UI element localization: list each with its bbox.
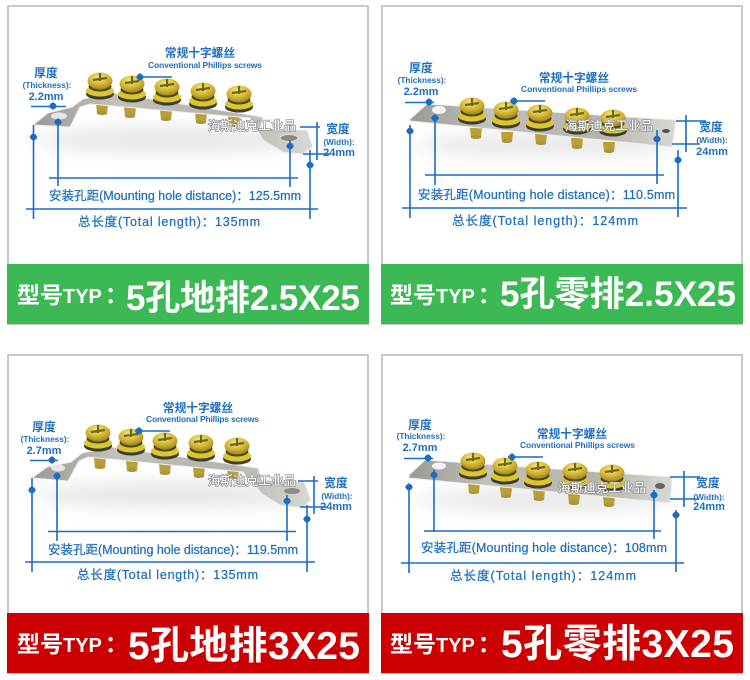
- label: width: (Width):: [321, 491, 353, 501]
- product photo: neutral bar with screws: [410, 98, 676, 153]
- model banner: 型号TYP：: [390, 631, 501, 657]
- label: screws: 常规十字螺丝: [163, 401, 233, 415]
- dimension lines: [25, 427, 328, 572]
- label: total length: 总长度(Total length)：135mm: [78, 214, 260, 229]
- dimension lines: [26, 73, 330, 219]
- dimension lines: [402, 97, 706, 218]
- label: thickness: 厚度: [409, 61, 433, 75]
- label: width: 24mm: [693, 501, 725, 513]
- label: thickness: 厚度: [32, 420, 56, 434]
- model banner: 型号TYP：: [17, 282, 128, 308]
- label: total length: 总长度(Total length)：135mm: [77, 567, 258, 582]
- label: thickness: 2.2mm: [404, 86, 439, 98]
- model banner: 型号TYP：: [390, 282, 501, 308]
- panel: 5-hole neutral bar 3X25: [381, 355, 743, 673]
- label: width: (Width):: [693, 492, 725, 502]
- label: screws: 常规十字螺丝: [537, 427, 607, 441]
- model banner: 5孔地排2.5X25: [126, 279, 360, 318]
- label: mounting hole distance: 安装孔距(Mounting hole distance)：108mm: [421, 540, 667, 555]
- watermark: 海斯迪克工业品: [565, 118, 653, 133]
- label: screws: Conventional Phillips screws: [148, 60, 262, 70]
- model banner: [381, 264, 743, 324]
- label: thickness: 厚度: [34, 66, 58, 80]
- label: screws: [146, 401, 259, 424]
- label: width: [696, 120, 728, 158]
- label: width: 宽度: [696, 476, 720, 490]
- label: mounting hole distance: 安装孔距(Mounting hole distance)：119.5mm: [48, 542, 298, 557]
- label: thickness: [397, 418, 445, 454]
- label: screws: [148, 46, 262, 70]
- label: width: (Width):: [696, 135, 728, 145]
- label: thickness: 2.7mm: [27, 445, 62, 457]
- label: width: 24mm: [696, 146, 728, 158]
- label: screws: Conventional Phillips screws: [521, 84, 637, 94]
- label: thickness: 2.7mm: [403, 442, 438, 454]
- label: width: 24mm: [320, 501, 352, 513]
- product photo: ground bar with screws: [32, 424, 311, 508]
- label: width: (Width):: [323, 137, 355, 147]
- model banner: 型号TYP：: [17, 631, 128, 657]
- label: width: 宽度: [324, 476, 348, 490]
- watermark: 海斯迪克工业品: [208, 118, 296, 133]
- label: width: 宽度: [699, 120, 723, 134]
- label: thickness: (Thickness):: [21, 434, 69, 444]
- watermark: 海斯迪克工业品: [208, 473, 296, 488]
- label: total length: 总长度(Total length)：124mm: [450, 568, 636, 583]
- label: width: [320, 476, 353, 513]
- product photo: ground bar with screws: [33, 72, 313, 154]
- model banner: [7, 613, 369, 673]
- label: screws: [521, 71, 637, 94]
- label: thickness: (Thickness):: [398, 75, 446, 85]
- label: screws: 常规十字螺丝: [165, 46, 235, 60]
- model banner: 5孔零排3X25: [501, 623, 734, 666]
- dimension lines: [401, 453, 700, 573]
- label: width: 宽度: [326, 122, 350, 136]
- panel: 5-hole ground bar 2.5X25: [7, 6, 369, 324]
- label: screws: Conventional Phillips screws: [520, 440, 635, 450]
- label: mounting hole distance: 安装孔距(Mounting hole distance)：110.5mm: [418, 187, 675, 202]
- label: width: [323, 122, 355, 159]
- model banner: 5孔地排3X25: [128, 625, 360, 668]
- label: thickness: 厚度: [408, 418, 432, 432]
- label: thickness: 2.2mm: [29, 91, 64, 103]
- label: width: [693, 476, 725, 513]
- panel: 5-hole neutral bar 2.5X25: [381, 6, 743, 324]
- label: thickness: (Thickness):: [397, 431, 445, 441]
- label: thickness: [23, 66, 71, 103]
- label: thickness: (Thickness):: [23, 80, 71, 90]
- label: screws: [520, 427, 635, 450]
- product photo: neutral bar with screws: [409, 452, 672, 507]
- panel: 5-hole ground bar 3X25: [7, 355, 369, 673]
- model banner: [381, 613, 743, 673]
- label: mounting hole distance: 安装孔距(Mounting hole distance)：125.5mm: [49, 188, 301, 203]
- label: screws: Conventional Phillips screws: [146, 414, 259, 424]
- label: width: 24mm: [323, 147, 355, 159]
- watermark: 海斯迪克工业品: [558, 480, 646, 495]
- model banner: [7, 264, 369, 324]
- model banner: 5孔零排2.5X25: [500, 275, 736, 314]
- label: thickness: [398, 61, 446, 98]
- label: thickness: [21, 420, 69, 457]
- label: total length: 总长度(Total length)：124mm: [452, 213, 638, 228]
- label: screws: 常规十字螺丝: [539, 71, 609, 85]
